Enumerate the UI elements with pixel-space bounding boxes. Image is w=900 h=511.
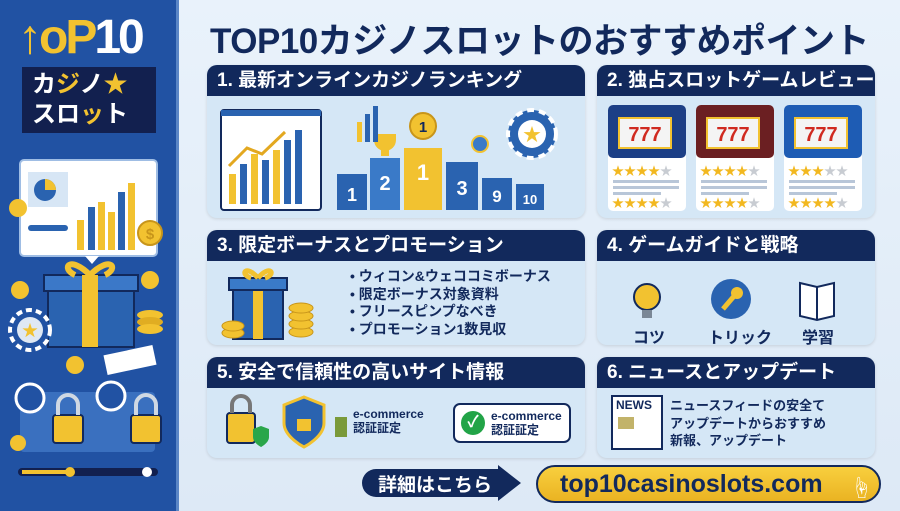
icon: newspaper: NEWS [616, 398, 652, 412]
badge text: 認証証定 [353, 421, 401, 435]
panel 1: ranking: 1. 最新オンラインカジノランキング [217, 70, 522, 91]
slot cards: ★★★★★ [788, 196, 848, 210]
news text [670, 398, 826, 448]
news text: 新報、アップデート [670, 433, 787, 448]
panel 3: bonuses [207, 230, 585, 345]
slot cards: 777 [716, 124, 750, 146]
chart and podium illustration: ★ [523, 125, 541, 145]
panel 1: ranking [207, 65, 585, 218]
chart and podium illustration: 9 [492, 187, 502, 206]
illustration: dashboard: $ [146, 226, 155, 243]
badge: e-commerce check: ✓ [467, 414, 479, 431]
badge: e-commerce check [453, 403, 571, 443]
logo box: カジノスロット [22, 67, 156, 133]
panel 4: guide [597, 230, 875, 345]
logo TOP10: ↑oP10 [18, 11, 142, 64]
icon: newspaper [611, 395, 663, 450]
news text: アップデートからおすすめ [670, 416, 826, 430]
slot cards: ★★★★★ [700, 196, 760, 210]
CTA arrow: 詳細はこちら [362, 465, 521, 501]
icon: pointer hand: ☝ [850, 476, 872, 501]
gift [48, 285, 134, 347]
slot cards: ★★★★★ [612, 164, 672, 178]
slot cards: 777 [628, 124, 662, 146]
bullet list: • ウィコン&ウェココミボーナス [350, 268, 551, 284]
CTA arrow: 詳細はこちら: 詳細はこちら [378, 475, 492, 496]
slot cards: 777 [804, 124, 838, 146]
panel 6: news [597, 357, 875, 458]
CTA button: URL: top10casinoslots.com [560, 470, 823, 498]
slot cards: ★★★★★ [700, 164, 760, 178]
chart and podium illustration [220, 106, 558, 211]
logo box: カジノスロット: スロット [32, 101, 128, 128]
panel 6: news: 6. ニュースとアップデート [607, 362, 836, 383]
illustration: dashboard [8, 159, 163, 477]
locks [20, 392, 155, 452]
slot cards: ★★★★★ [612, 196, 672, 210]
bullet list: • フリースピンプなべき [350, 303, 498, 319]
badge: e-commerce check: e-commerce [491, 409, 562, 423]
slot cards: ★★★★★ [788, 164, 848, 178]
sidebar [0, 0, 179, 511]
badge text: e-commerce [353, 407, 424, 421]
badge: e-commerce check: 認証証定 [491, 423, 539, 437]
bullet list: • 限定ボーナス対象資料 [350, 286, 499, 302]
panel 5: safety [207, 357, 585, 458]
chart and podium illustration: 3 [456, 178, 468, 200]
panel 4: guide: 4. ゲームガイドと戦略 [607, 235, 799, 256]
bullet list: • プロモーション1数見収 [350, 320, 506, 336]
panel 2: slot reviews: 2. 独占スロットゲームレビュー [607, 70, 875, 91]
logo box: カジノスロット: カジノ★ [32, 71, 128, 98]
illustration: dashboard: ★ [22, 323, 38, 340]
panel 2: slot reviews [597, 65, 875, 218]
icons: lock, shield [226, 394, 347, 449]
chart and podium illustration: 1 [419, 119, 427, 136]
title: TOP10カジノスロットのおすすめポイント [210, 22, 869, 61]
icon: gift with coins [222, 268, 314, 340]
slot cards [608, 105, 862, 211]
panel 3: bonuses: 3. 限定ボーナスとプロモーション [217, 235, 504, 256]
chart and podium illustration: 10 [523, 192, 537, 207]
chart and podium illustration: 1 [417, 160, 429, 185]
news text: ニュースフィードの安全て [670, 398, 825, 413]
panel 5: safety: 5. 安全で信頼性の高いサイト情報 [217, 362, 504, 383]
badge text [353, 407, 424, 435]
bullet list [350, 268, 551, 336]
icons: bulb, key, book [633, 279, 835, 321]
chart and podium illustration: 1 [347, 185, 357, 205]
CTA button: URL [536, 465, 881, 503]
chart and podium illustration: 2 [379, 173, 391, 195]
